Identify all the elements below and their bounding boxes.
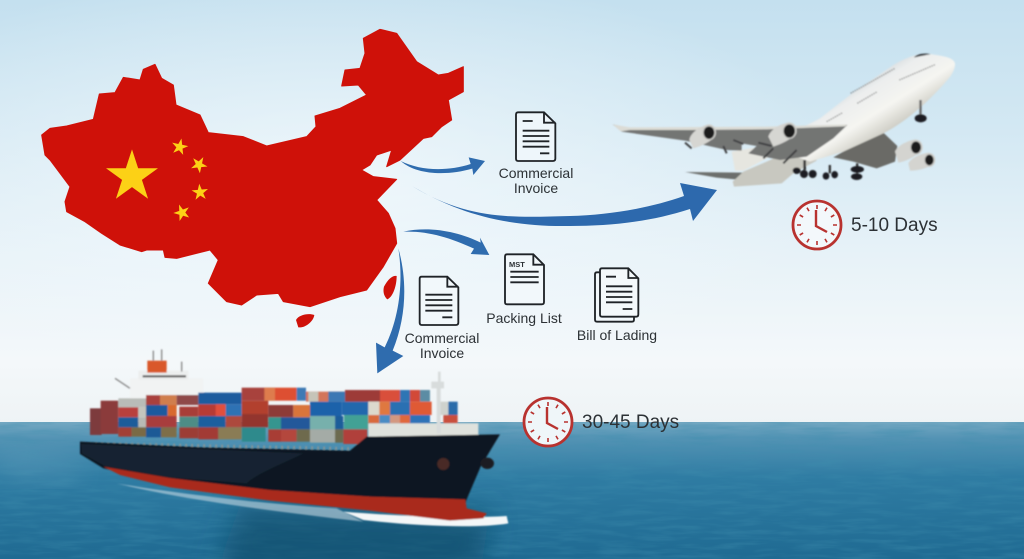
containers: stern stacks: [90, 395, 198, 438]
cockpit window: [914, 54, 931, 57]
wing flaps: [685, 140, 797, 163]
island: Taiwan: [383, 276, 397, 299]
icon: clock sea freight: [524, 398, 572, 446]
label: bill of lading: Bill of Lading: [577, 327, 657, 343]
wake: [117, 483, 363, 522]
map of China with flag stars: [42, 29, 463, 327]
container ship: [80, 349, 508, 526]
engine 1: [689, 124, 716, 148]
island: Hainan: [296, 314, 314, 327]
engine 4: [908, 153, 935, 171]
fuselage: [787, 54, 955, 162]
bulbous bow: [481, 458, 494, 469]
deck railing: [83, 443, 350, 449]
engine 3: [895, 139, 923, 163]
engine 2: [768, 122, 797, 147]
superstructure: [115, 349, 203, 398]
icon: commercial invoice document (air): [516, 112, 555, 161]
far wing: [833, 133, 897, 168]
anchor: [437, 458, 449, 470]
icon: commercial invoice document (sea): [420, 277, 458, 325]
arrow: to packing list: [403, 229, 489, 255]
arrow: China to airplane: [412, 183, 717, 226]
horizontal stabilizer: [685, 172, 744, 180]
label: commercial invoice (sea): Invoice: [420, 345, 464, 361]
containers: midship stacks: [198, 388, 345, 443]
large star: [106, 149, 158, 199]
text: MST stamp on packing list: MST: [509, 260, 525, 269]
tail fin: [732, 147, 770, 171]
arrow: to first commercial invoice: [401, 157, 485, 175]
icon: clock air freight: [793, 201, 841, 249]
airplane: [613, 54, 955, 187]
label: packing list: Packing List: [486, 310, 562, 326]
arrow: China to ship: [376, 248, 404, 373]
black hull: [80, 434, 500, 503]
label: sea transit time: 30-45 Days: [582, 412, 679, 433]
small stars: [170, 137, 210, 222]
icon: packing list document: [505, 254, 544, 304]
sea: [0, 422, 1024, 559]
cabin windows: [827, 65, 935, 122]
mainland China: [42, 29, 463, 307]
landing gear: [793, 100, 927, 180]
red lower hull: [103, 467, 487, 521]
label: commercial invoice (sea): Commercial: [405, 330, 479, 346]
rear fuselage: [733, 140, 817, 187]
label: air transit time: 5-10 Days: [851, 215, 938, 236]
foremast: [431, 372, 444, 433]
wing highlight: [613, 124, 847, 131]
label: commercial invoice (air): Invoice: [514, 180, 558, 196]
label: commercial invoice (air): Commercial: [499, 165, 573, 181]
hull shading: [81, 444, 303, 483]
near wing: [613, 124, 847, 160]
background sky: [0, 0, 1024, 425]
icon: bill of lading document stack: [595, 268, 638, 322]
containers: forward stacks: [342, 390, 478, 444]
